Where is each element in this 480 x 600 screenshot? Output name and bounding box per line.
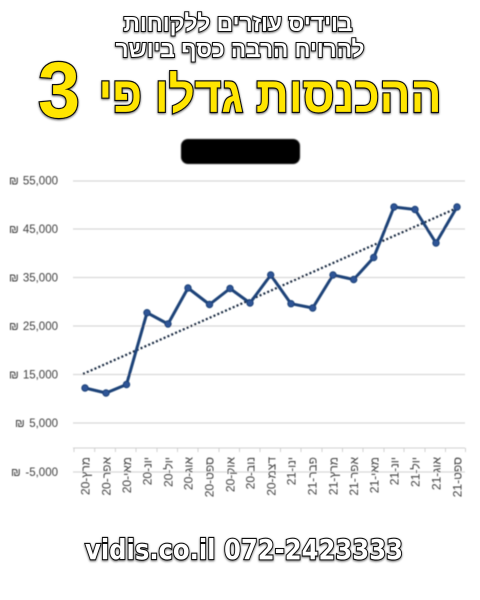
x axis month labels: ספט-21	[450, 457, 464, 497]
data point markers	[82, 204, 460, 396]
main title: income tripled: ההכנסות גדלו פי	[98, 67, 442, 123]
x axis month labels: יול-20	[162, 457, 176, 487]
heading: intro lines	[116, 10, 364, 62]
y axis labels: 25,000	[23, 321, 58, 333]
y axis labels: ₪	[11, 467, 21, 479]
data series line	[85, 207, 457, 393]
y axis labels: ₪	[9, 176, 19, 188]
x axis month labels: מרץ-21	[326, 457, 340, 495]
y axis labels: 45,000	[23, 224, 58, 236]
grid lines	[73, 181, 465, 472]
y axis labels: ₪	[9, 272, 19, 284]
x axis month labels: יונ-20	[140, 457, 154, 485]
x axis month labels: יונ-21	[388, 457, 402, 485]
x axis month labels: אוק-20	[224, 457, 238, 492]
y axis labels: ₪	[9, 321, 19, 333]
redaction: black block	[181, 139, 300, 164]
footer: website and phone: vidis.co.il 072-2423333	[85, 533, 403, 566]
x axis month labels: אוג-21	[430, 457, 444, 490]
x axis month labels: ספט-20	[202, 457, 216, 497]
x axis month labels: נוב-20	[244, 457, 258, 489]
x axis month labels: מאי-20	[120, 457, 134, 493]
x axis month labels: פבר-21	[306, 457, 320, 495]
y axis labels	[9, 176, 58, 479]
line chart	[9, 176, 466, 497]
trend line	[83, 208, 457, 374]
x axis month labels	[78, 457, 464, 497]
heading: intro lines: בוידיס עוזרים ללקוחות	[124, 10, 352, 36]
main title: income tripled: 3	[38, 45, 80, 134]
y axis labels: ₪	[9, 370, 19, 382]
heading: intro lines: להרויח הרבה כסף ביושר	[116, 36, 364, 62]
y axis labels: 15,000	[23, 370, 58, 382]
x axis month labels: מאי-21	[368, 457, 382, 493]
x axis month labels: דצמ-20	[264, 457, 278, 496]
main title: income tripled	[38, 45, 442, 134]
y axis labels: -5,000	[25, 467, 58, 479]
y axis labels: 35,000	[23, 272, 58, 284]
x axis month labels: אפר-21	[347, 457, 361, 496]
x axis month labels: מרץ-20	[78, 457, 92, 495]
y axis labels: 55,000	[23, 176, 58, 188]
x axis month labels: יול-21	[408, 457, 422, 487]
x axis month labels: אפר-20	[100, 457, 114, 496]
y axis labels: ₪	[15, 418, 25, 430]
y axis labels: 5,000	[29, 418, 58, 430]
y axis labels: ₪	[9, 224, 19, 236]
x axis month labels: אוג-20	[182, 457, 196, 490]
x axis month labels: ינו-21	[284, 457, 298, 485]
x axis with ticks	[73, 448, 466, 452]
